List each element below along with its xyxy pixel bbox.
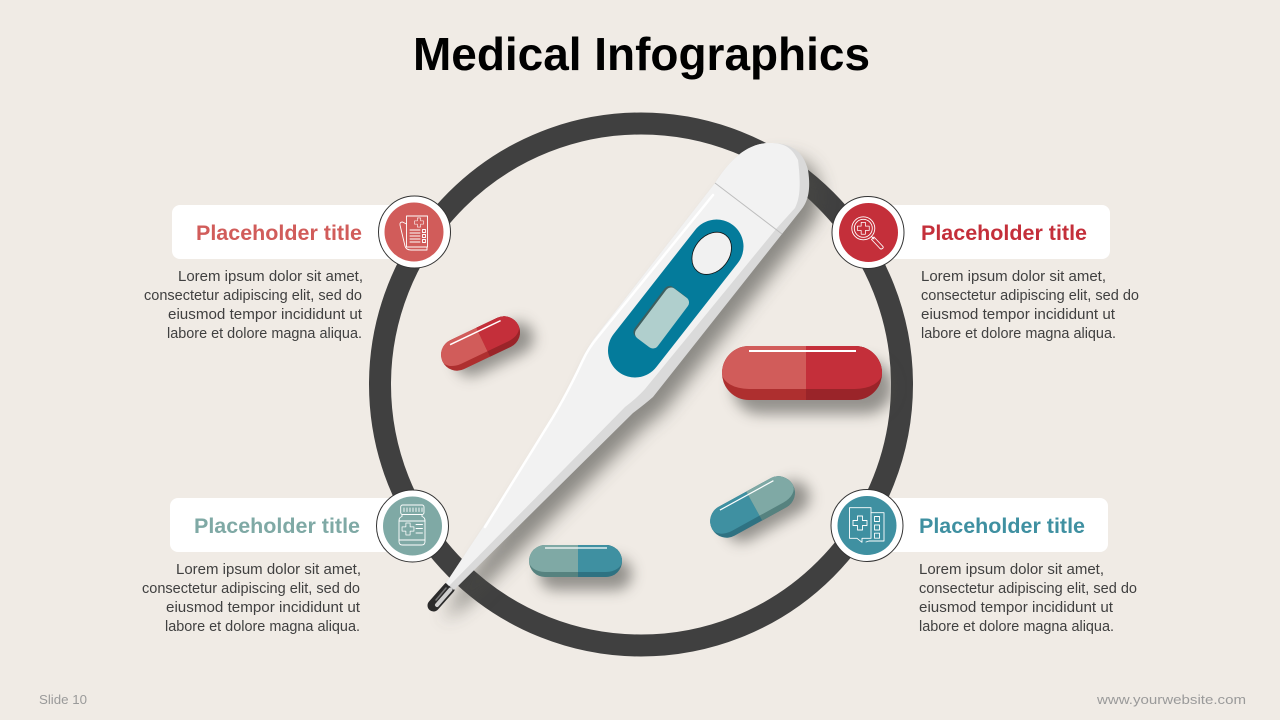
footer: website: www.yourwebsite.com	[1096, 692, 1246, 707]
panel: bottom right	[868, 498, 1137, 635]
icon: medical report badge	[378, 196, 450, 268]
panel: top left	[144, 205, 412, 342]
heading: top left: Placeholder title	[196, 221, 362, 245]
text block: bottom left	[142, 562, 361, 635]
highlight	[485, 195, 713, 527]
icon: prescription pack badge	[831, 490, 903, 562]
text block: bottom right: Lorem ipsum dolor sit amet,	[919, 562, 1104, 578]
panel: bottom left	[142, 498, 410, 635]
text block: top left	[144, 269, 363, 342]
title card: bottom right	[868, 498, 1108, 552]
text block: bottom left: consectetur adipiscing elit, sed do	[142, 581, 360, 597]
icon: magnifier badge	[832, 196, 904, 268]
text block: top left: eiusmod tempor incididunt ut	[168, 307, 362, 323]
ring	[380, 124, 902, 646]
button	[684, 224, 740, 282]
text block: top right: consectetur adipiscing elit, sed do	[921, 288, 1139, 304]
text block: top right	[921, 269, 1139, 342]
thermometer light face	[446, 143, 800, 586]
thermometer	[434, 143, 820, 620]
text block: bottom right	[919, 562, 1137, 635]
display housing	[635, 246, 716, 350]
text block: bottom left: eiusmod tempor incididunt ut	[166, 600, 360, 616]
text block: top right: labore et dolore magna aliqua.	[921, 326, 1116, 342]
text block: top right: Lorem ipsum dolor sit amet,	[921, 269, 1106, 285]
pill: flat teal	[529, 545, 632, 590]
text block: bottom right: eiusmod tempor incididunt ut	[919, 600, 1113, 616]
heading: bottom right: Placeholder title	[919, 514, 1085, 538]
title: Medical Infographics	[413, 28, 870, 80]
title card: top right	[870, 205, 1110, 259]
text block: top right: eiusmod tempor incididunt ut	[921, 307, 1115, 323]
heading: bottom left: Placeholder title	[194, 514, 360, 538]
thermometer shadow	[444, 157, 820, 620]
text block: bottom right: consectetur adipiscing elit, sed do	[919, 581, 1137, 597]
pill: rotated teal	[704, 465, 816, 553]
text block: top left: Lorem ipsum dolor sit amet,	[178, 269, 363, 285]
pill: small red	[436, 307, 539, 386]
panel: top right	[870, 205, 1139, 342]
title card: bottom left	[170, 498, 410, 552]
heading: top right: Placeholder title	[921, 221, 1087, 245]
text block: top left: labore et dolore magna aliqua.	[167, 326, 362, 342]
title card: top left	[172, 205, 412, 259]
screen	[631, 284, 691, 351]
text block: bottom left: labore et dolore magna aliqua.	[165, 619, 360, 635]
pill: large red	[722, 346, 893, 414]
thermometer body	[446, 143, 809, 590]
text block: top left: consectetur adipiscing elit, sed do	[144, 288, 362, 304]
text block: bottom right: labore et dolore magna aliqua.	[919, 619, 1114, 635]
footer: slide number: Slide 10	[39, 692, 87, 707]
cap seam	[715, 183, 782, 234]
icon: pill bottle badge	[376, 490, 448, 562]
text block: bottom left: Lorem ipsum dolor sit amet,	[176, 562, 361, 578]
metal tip	[434, 588, 450, 606]
